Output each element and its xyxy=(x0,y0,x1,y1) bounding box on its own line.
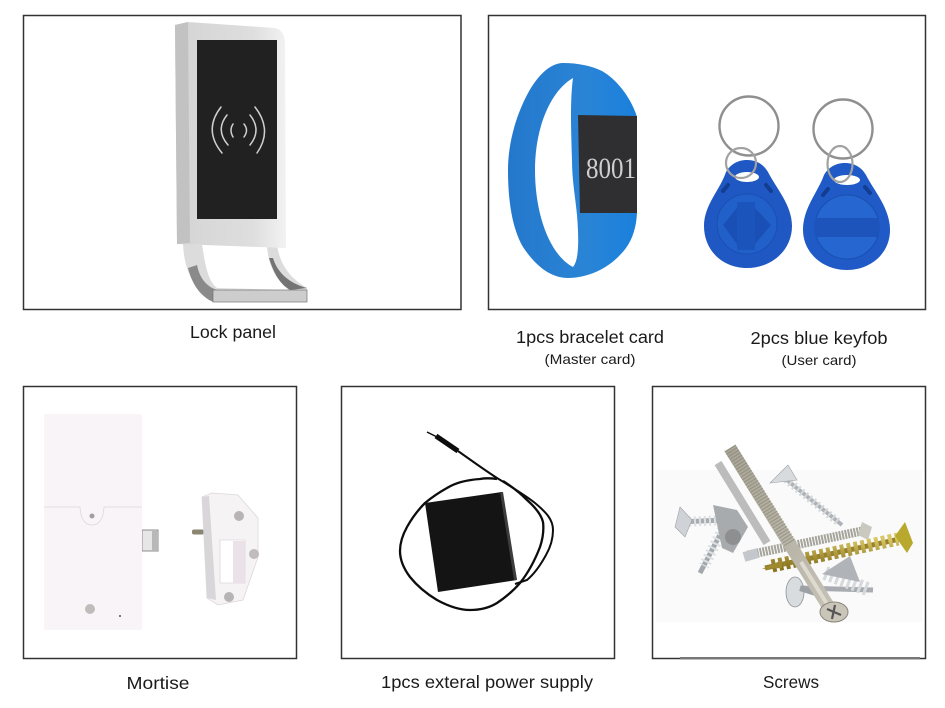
icon: bracelet card xyxy=(508,63,637,278)
bottom screw xyxy=(800,588,873,590)
gold screw xyxy=(765,539,900,568)
top right screw xyxy=(782,476,842,525)
icon: RFID wave symbol xyxy=(212,107,265,153)
icon: bracelet card: 8001 xyxy=(586,152,636,185)
label: lock panel: Lock panel xyxy=(190,322,276,342)
main bolt xyxy=(730,448,835,617)
icon: lock faceplate xyxy=(175,22,286,248)
panel: cards xyxy=(488,16,926,310)
label: bracelet card xyxy=(516,327,664,367)
icon: mortise body xyxy=(44,414,158,630)
label: keyfob: 2pcs blue keyfob xyxy=(750,328,888,348)
bottom watermark smudge xyxy=(680,657,920,660)
soft shadow backdrop xyxy=(656,470,922,622)
panel: power supply xyxy=(342,386,614,658)
icon: strike plate xyxy=(192,493,259,605)
icon: blue keyfob back xyxy=(803,100,890,270)
label: screws: Screws xyxy=(763,672,819,692)
panel: lock panel xyxy=(24,16,461,310)
panel: screws xyxy=(652,386,926,660)
left horizontal screw xyxy=(680,520,723,522)
panel: mortise xyxy=(24,386,296,658)
label: keyfob xyxy=(750,328,888,368)
icon: lock handle xyxy=(183,244,307,302)
label: power supply: 1pcs exteral power supply xyxy=(381,672,593,692)
down left screw xyxy=(700,525,725,573)
rod xyxy=(718,463,767,543)
label: bracelet card: 1pcs bracelet card xyxy=(516,327,664,347)
icon: screws xyxy=(675,448,913,622)
label: bracelet card: (Master card) xyxy=(544,351,636,367)
knurled screw xyxy=(748,531,862,555)
icon: battery box xyxy=(425,492,517,592)
label: keyfob: (User card) xyxy=(782,352,856,368)
icon: cable and jack xyxy=(400,432,553,610)
label: mortise: Mortise xyxy=(126,673,190,693)
icon: blue keyfob front xyxy=(704,96,792,268)
